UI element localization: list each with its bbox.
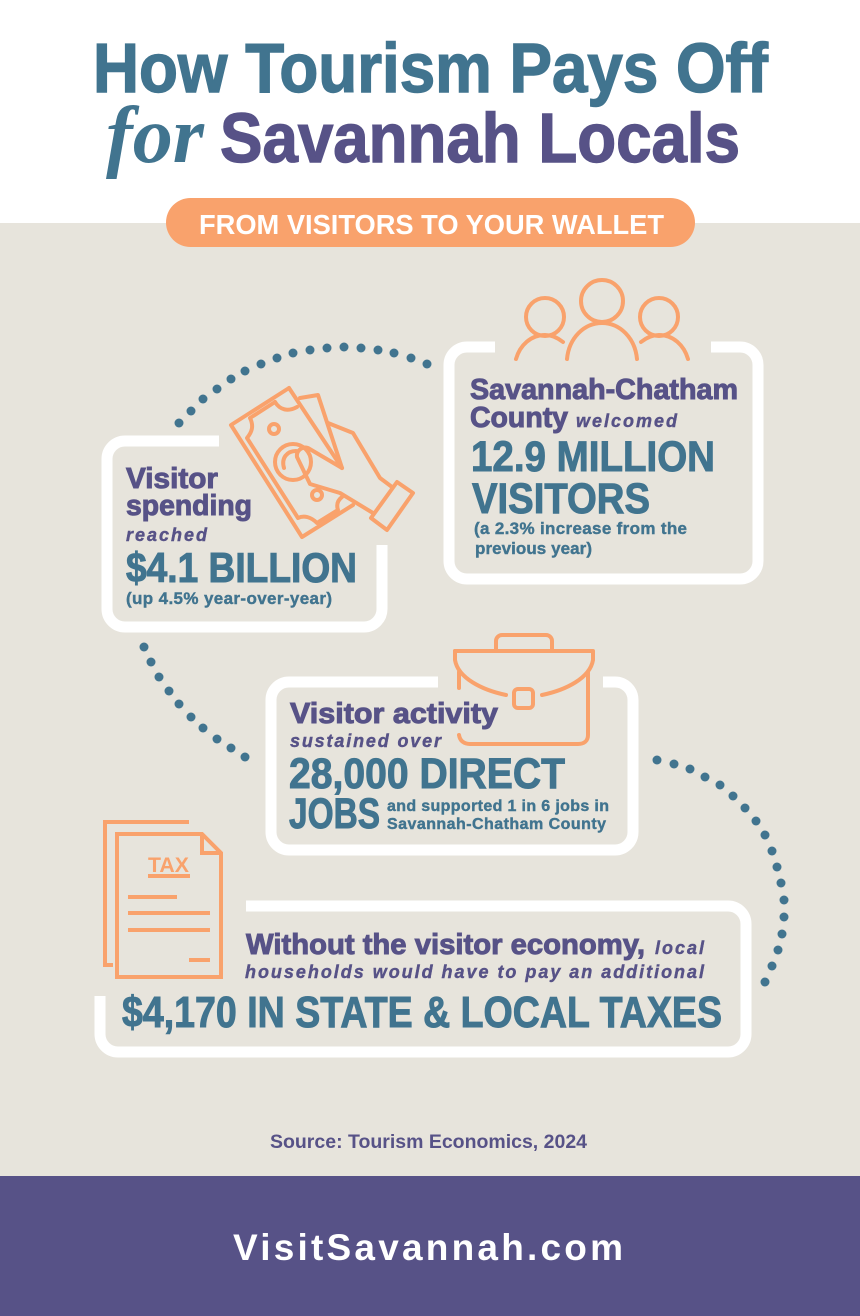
jobs text: sustained over bbox=[290, 731, 442, 751]
jobs text: and supported 1 in 6 jobs in bbox=[387, 798, 609, 815]
visitors text: County bbox=[470, 402, 568, 434]
dotted arrow: spending to jobs bbox=[140, 642, 250, 762]
spending text: spending bbox=[126, 490, 252, 522]
subtitle pill bbox=[166, 198, 695, 247]
jobs text: JOBS bbox=[289, 790, 380, 838]
visitors text: (a 2.3% increase from the bbox=[474, 519, 687, 538]
visitors text: previous year) bbox=[475, 539, 592, 558]
dotted arrow: visitors to spending bbox=[174, 342, 432, 428]
spending text: (up 4.5% year-over-year) bbox=[126, 589, 332, 608]
panel: visitor spending bbox=[107, 388, 413, 627]
visitors text bbox=[470, 374, 738, 558]
source: Source: Tourism Economics, 2024 bbox=[270, 1132, 587, 1153]
taxes text: local bbox=[655, 938, 705, 958]
spending text: $4.1 BILLION bbox=[126, 544, 357, 591]
dotted arrow: jobs to taxes bbox=[652, 756, 788, 986]
visitors text: 12.9 MILLION bbox=[471, 433, 715, 481]
footer: VisitSavannah.com bbox=[233, 1227, 623, 1268]
icon: tax document bbox=[105, 822, 221, 977]
jobs text: 28,000 DIRECT bbox=[289, 750, 565, 798]
subtitle pill: FROM VISITORS TO YOUR WALLET bbox=[199, 209, 664, 240]
title: How Tourism Pays Off bbox=[93, 29, 769, 107]
icon: tax document: TAX bbox=[148, 854, 189, 877]
jobs text: Visitor activity bbox=[290, 698, 498, 730]
visitors text: VISITORS bbox=[472, 475, 650, 523]
panel: visitors bbox=[449, 280, 758, 579]
title: Savannah Locals bbox=[220, 99, 740, 177]
spending text bbox=[126, 463, 357, 608]
panel: jobs bbox=[271, 635, 633, 850]
footer bbox=[0, 1176, 860, 1316]
jobs text: Savannah-Chatham County bbox=[387, 816, 606, 833]
visitors text: welcomed bbox=[576, 411, 678, 431]
icon: hand with money bbox=[231, 388, 413, 537]
spending text: reached bbox=[126, 525, 208, 545]
taxes text: Without the visitor economy, bbox=[246, 929, 645, 961]
taxes text bbox=[122, 929, 722, 1037]
icon: briefcase bbox=[455, 635, 593, 744]
taxes text: $4,170 IN STATE & LOCAL TAXES bbox=[122, 988, 722, 1037]
spending text: Visitor bbox=[126, 463, 218, 495]
jobs text bbox=[289, 698, 609, 838]
visitors text: Savannah-Chatham bbox=[470, 374, 738, 406]
title bbox=[93, 29, 769, 180]
panel: taxes bbox=[100, 822, 746, 1052]
icon: people bbox=[516, 280, 688, 359]
taxes text: households would have to pay an additional bbox=[245, 962, 705, 982]
title: for bbox=[106, 92, 205, 180]
